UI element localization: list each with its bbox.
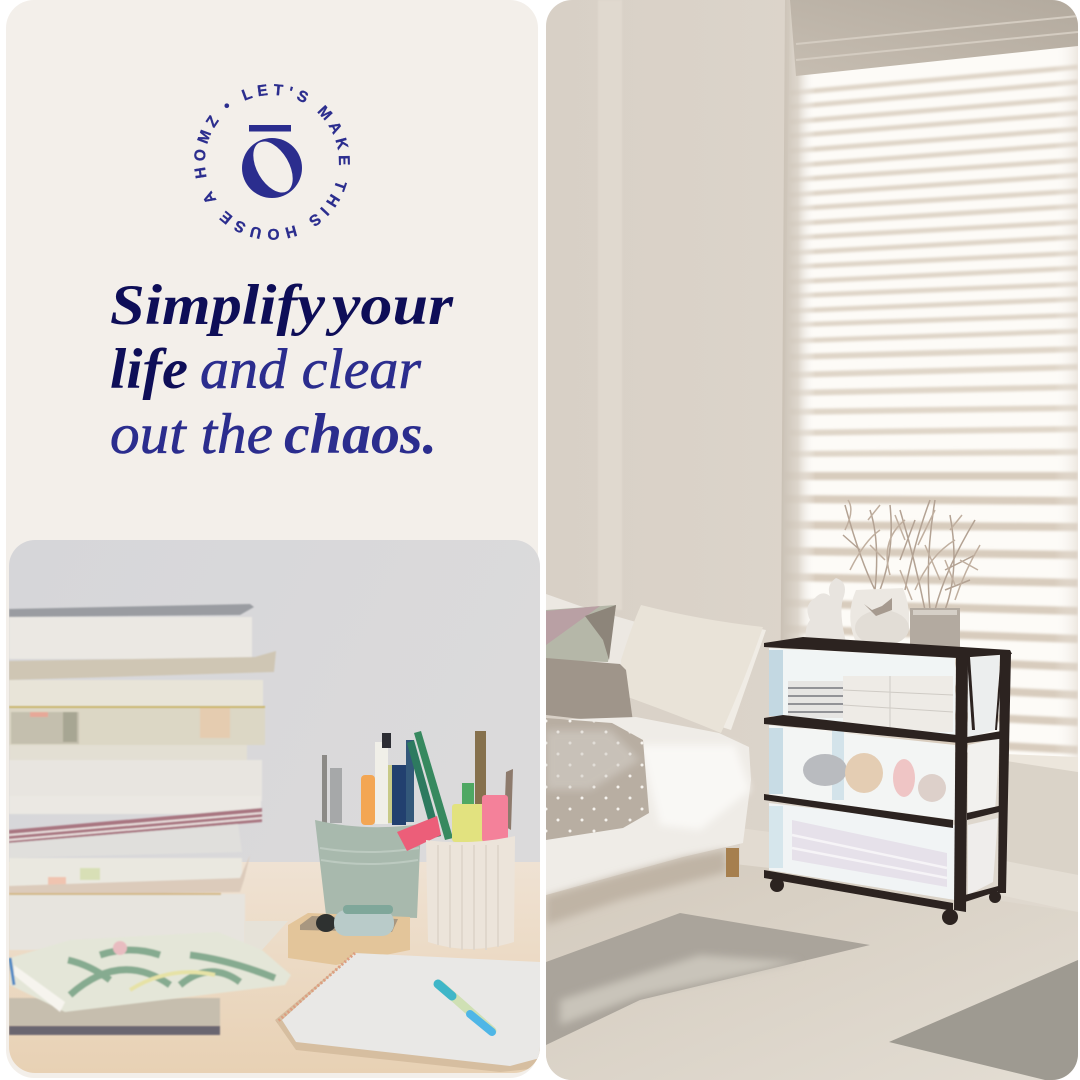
icon: o with macron [242, 125, 302, 199]
square planter [910, 608, 960, 650]
blue drawer edges [769, 650, 783, 716]
patterned cushion [546, 605, 616, 662]
headline: chaos. [284, 403, 437, 466]
black frame [764, 637, 1012, 925]
logo: circular badge [194, 84, 350, 240]
wall [546, 0, 1078, 1080]
grey rug [546, 913, 870, 1045]
cream cushion [621, 605, 766, 733]
window sill [1009, 754, 1078, 772]
spiral notebook and pen [275, 953, 540, 1072]
folded linens [792, 820, 947, 887]
wheels [770, 878, 784, 892]
left and right blind shading [780, 0, 1078, 757]
dried branches [843, 500, 980, 610]
floral book [10, 932, 291, 1012]
plush toys [803, 753, 946, 802]
blind slats [785, 67, 1078, 750]
white figurine [806, 578, 846, 642]
photo: bright room with drawer cart [546, 0, 1078, 1080]
curtain fold on wall [600, 2, 604, 604]
window blinds [780, 0, 1078, 757]
baseboard [1000, 860, 1078, 912]
white vase [850, 588, 909, 646]
highlighters [452, 804, 484, 842]
small book behind [245, 921, 288, 950]
grey cushion [546, 658, 633, 722]
bed leg [726, 848, 739, 877]
shadow under bed [546, 850, 726, 925]
headline: Simplify [110, 274, 326, 337]
headline: and clear [200, 338, 422, 401]
lower wall by window [1000, 760, 1078, 875]
clear drawers [769, 648, 955, 738]
blind valance [790, 0, 1078, 76]
sofa back [546, 594, 634, 665]
panel: left cream card [6, 0, 538, 1078]
circular slogan text: • LET'S MAKE THIS HOUSE A HOMZ [194, 84, 350, 240]
headline: your [325, 274, 454, 337]
drawer cart [764, 637, 1012, 925]
star throw [546, 718, 649, 840]
washi tape [397, 816, 441, 851]
table [9, 862, 540, 1073]
stacked books in drawer [788, 676, 953, 732]
floor [546, 864, 769, 1080]
stack of books [9, 604, 276, 950]
wall [9, 540, 540, 870]
pens and pencils [322, 731, 513, 840]
bed cover [546, 717, 751, 895]
notebook under floral book [9, 998, 220, 1026]
second rug [889, 960, 1078, 1080]
ribbed cream cup [426, 836, 515, 950]
wooden tray with tape rolls [288, 905, 410, 965]
green metal cup [315, 820, 421, 918]
photo: desk with books and pens [9, 540, 540, 1073]
headline: life [110, 338, 188, 401]
headline [110, 274, 454, 466]
headline: out the [110, 403, 273, 466]
